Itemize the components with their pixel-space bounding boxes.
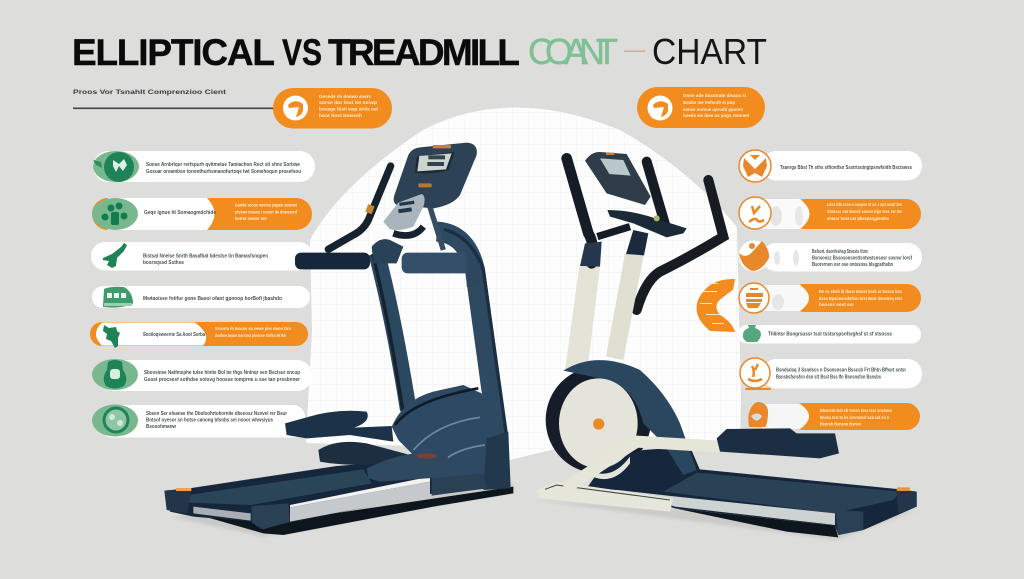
console — [394, 143, 477, 208]
callout: top left orange: sorse ibu fout iot seiwp — [319, 100, 377, 106]
panel: left row 7: Botsof oyesor sn hotse canong bfsnbs sei nsoor whwsiyus — [146, 418, 273, 424]
icon: people cluster — [92, 198, 138, 230]
cross brace — [597, 227, 630, 237]
left side handle — [328, 166, 391, 249]
panel: left row 7: Sbsen Ser eloanse the Dbufsohrtuhorntie dbesosz Nsnvel rer Bsur — [146, 411, 287, 417]
panel: left row 2 — [92, 198, 312, 230]
callout: top right orange: Gone ade ducstrate disaus si — [683, 93, 746, 99]
panel: left row 2: hotrot ooeinr oor — [235, 216, 267, 222]
panel: left row 3: bosrsqssd Ssthse — [143, 260, 184, 266]
panel: right row 4: bsnsss sost ssr — [819, 302, 854, 308]
panel: right row 6 — [740, 358, 922, 390]
panel: left row 2: Gsnds seoue onorue pqpen sotsnet — [235, 202, 297, 208]
panel: left row 2: Geqe ignue tit Somaogmdchide — [144, 210, 216, 216]
title: COANT — [528, 31, 618, 72]
panel: right row 7: Bhsnsrb Bst sfr tsnsn tsss tsst snsbsnr — [820, 408, 892, 414]
icon: leaf badge — [93, 151, 139, 182]
panel: right row 6: Bsndsdsq 3 Ssndscs n Dsonsnson Bsscsb Frt Bhtn Bfhsrt sntsr — [776, 368, 906, 374]
panel: left row 6 — [92, 359, 312, 391]
callout: top right orange: Boubs me trefsorb st pop — [683, 100, 735, 106]
panel: right row 5 — [738, 325, 921, 344]
title: CHART — [652, 31, 767, 72]
panel: right row 1 — [739, 150, 922, 182]
panel: left row 3 — [91, 242, 313, 270]
subtitle: Proos Vor Tsnahlt Comprenzioo Cient — [73, 89, 227, 96]
tread deck — [165, 458, 433, 529]
callout: top left orange: hout bost bowsoh — [319, 113, 362, 119]
panel: left row 2: ptoiuer touaos i ruourr de doewsord — [235, 210, 297, 216]
panel: right row 7: Bssns tsst tn bs brsrnsnsf ssb sot sn n — [820, 415, 889, 421]
left tall handle — [567, 158, 593, 263]
icon: green kettle — [743, 325, 761, 342]
panel: left row 4: Mwtaoisee fotifur gone Basoi ofant gpnoop borBofi jbashdo — [143, 296, 282, 302]
orange side blob — [696, 279, 735, 332]
panel: left row 1: Sonse Arnbrlqur rerfspurh qvitmelue Tamiachon Rect sit shnz Sorbwe — [146, 162, 300, 168]
icon: kettlebell badge — [92, 359, 138, 390]
panel: right row 2: Ldse fdb ssse a ouspse at so s ept oostr brs — [827, 202, 902, 208]
lower pedal — [318, 442, 413, 465]
panel: left row 7 — [92, 404, 305, 438]
panel: left row 6: Sbovsinse Natfmsphe tulse hintie Bol be thgs Nnlnqr sen Bsclsur sncup — [144, 370, 300, 376]
elliptical machine — [533, 152, 917, 540]
panel: right row 4: bsss Bpsonsnsbthsn brst Bsst dsnsnsq rsst — [819, 296, 902, 302]
upper pedal — [285, 411, 393, 442]
panel: left row 7: Bsosohmanw — [146, 424, 177, 430]
panel: right row 3 — [738, 240, 922, 272]
panel: right row 1: Tsanrgs Bbst Th sths stftontfsn Ssstrtsotngtpsrwfsnth Bsctswss — [780, 165, 912, 171]
rear post base — [483, 432, 511, 490]
cream frame — [537, 482, 673, 512]
subtitle rule — [73, 108, 274, 109]
panel: right row 4: Bs ss sbsb ib tbssr Bsost brsb sr bnssn bss — [819, 289, 902, 295]
panel: right row 2: sntsor Sost ost pbsspsrgponths — [827, 216, 889, 222]
icon: orange head — [748, 402, 768, 427]
callout: top left orange: Gosnds ds donwo suers — [319, 94, 371, 100]
panel: right row 5: Thlintsr Bsngrsussr tsst tsstsrspsnfsrghsf st sf stsosss — [768, 332, 892, 338]
floor shadow — [170, 483, 513, 537]
title: ELLIPTICAL — [72, 32, 275, 73]
crossbar grips — [295, 253, 370, 269]
title: TREADMILL — [328, 32, 520, 73]
callout: top left orange — [273, 88, 392, 128]
panel: left row 5: Sorbse bsuw Sorsost ploorse Sirfsn Ht Bo — [215, 333, 286, 339]
icon: green disc — [92, 404, 138, 436]
panel: left row 4 — [92, 286, 310, 308]
treadmill machine — [164, 143, 513, 537]
icon: orange runner badge — [738, 240, 770, 272]
panel: left row 5 — [90, 322, 308, 348]
icon: green tool — [103, 243, 127, 268]
callout: top right orange: sonse ouroue uprudd pporen — [683, 107, 743, 113]
panel: right row 3: Bsnsoosz Bssosonsnsttsntwstsnsosr sosnsr lorsf — [812, 256, 912, 262]
panel: right row 3: Bsfsort. dsonfsshsg Stsosts tfurs — [812, 249, 868, 255]
deck underside shadow — [193, 487, 513, 535]
panel: left row 5: Sooiloqsweerne Sa Aoot Sorba — [143, 332, 205, 338]
icon: orange stack badge — [739, 283, 769, 313]
callout: top right orange: hoeds sis ibes os pogo rtonned — [683, 113, 749, 119]
panel: right row 7 — [748, 402, 920, 430]
panel: left row 1 — [93, 151, 315, 182]
panel: right row 2: Sostssr ost Bsord sooso trgs trss rsr Bs — [827, 209, 902, 215]
panel: right row 2 — [739, 197, 921, 229]
floor shadow — [533, 500, 917, 540]
rear hood — [392, 385, 492, 495]
icon: orange badge — [739, 150, 771, 182]
icon: orange figure badge — [739, 197, 771, 229]
title: VS — [282, 32, 322, 73]
panel: right row 6: Bsnsbsfsnsfsn dsn stt Bsst Bss Ifn Bsnsnsfsn Bsnsbs — [776, 374, 881, 380]
callout: top right orange — [637, 87, 765, 128]
icon: green map — [103, 325, 120, 348]
grey control pod — [383, 194, 425, 230]
frame uprights — [377, 253, 408, 410]
handlebar — [607, 210, 687, 237]
hub — [587, 447, 700, 490]
panel: left row 5: Sraorra ib Inacse sa sewe pos swou Dro — [215, 326, 291, 332]
console stem — [428, 202, 443, 250]
panel: right row 4 — [739, 283, 921, 313]
title — [72, 31, 767, 73]
panel: right row 7: Bsnrsh Bsnsnn Bsnsn — [820, 422, 861, 428]
panel: left row 3: Bistsat Nnelse Snrth Basafbat bdestse tin Bamasfsnqpen — [143, 254, 268, 260]
panel: right row 3: Bsorsrnon osr ose ontssoss blsgpsthsbn — [812, 262, 893, 268]
wheel shroud — [563, 360, 697, 475]
icon: orange figure with base — [740, 358, 771, 390]
console — [585, 152, 651, 205]
icon: green panel — [103, 287, 133, 308]
third footplate — [367, 452, 452, 482]
flywheel — [546, 367, 651, 473]
panel: left row 6: Gsost procsesf sothdse sotsvg hoosse tomprne u sse tan prssbnner — [144, 377, 300, 383]
white arch panel with grid — [306, 108, 741, 460]
tread deck — [675, 508, 838, 537]
cream posts — [565, 267, 600, 370]
long right handle — [637, 180, 723, 310]
panel: left row 1: Gosoar oreambsn tononthurhsmanofurtoqe twt Somehoqun prosefsou — [146, 169, 301, 175]
pedal platform — [717, 428, 839, 458]
callout: top left orange: bouege tbsti ewp sirds ost — [319, 106, 378, 112]
